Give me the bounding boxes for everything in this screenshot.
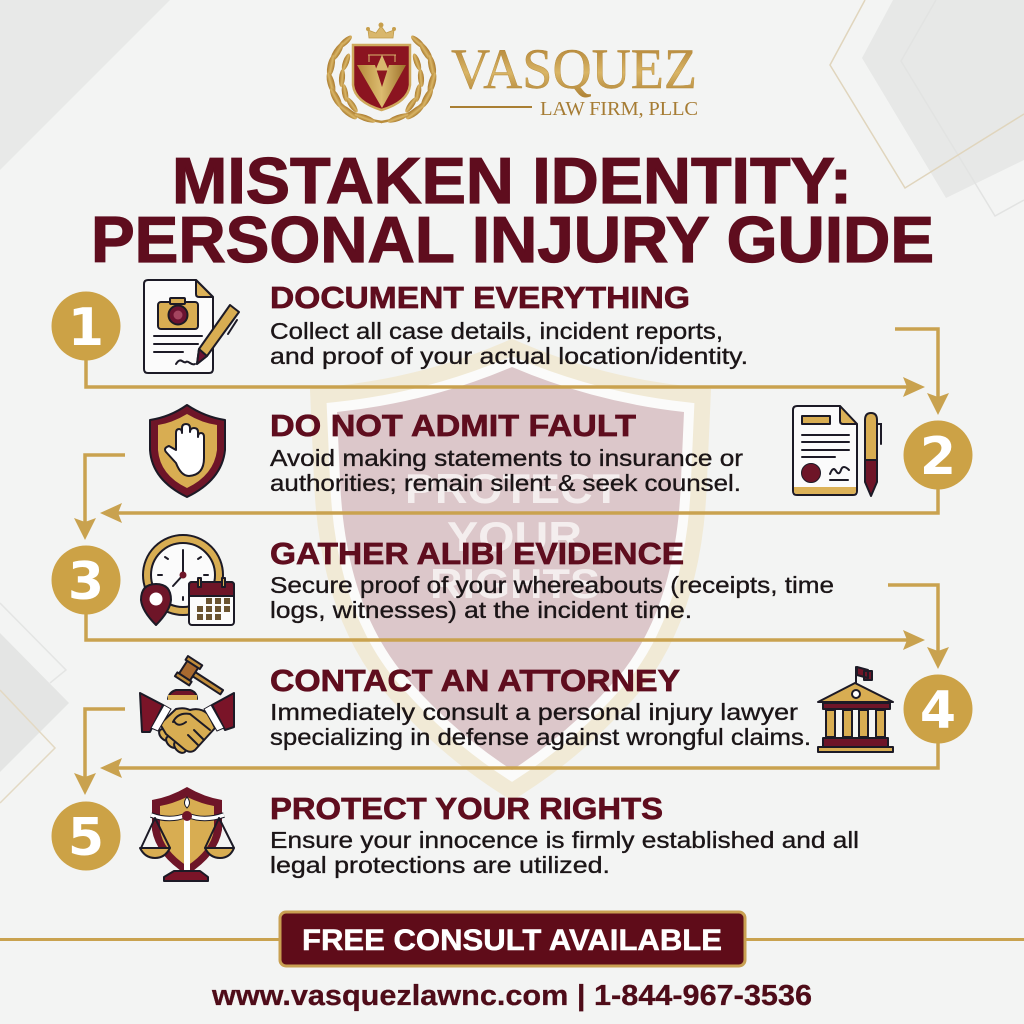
watermark: protect your rights shield [337,367,684,770]
step 5: protect your rights [52,787,859,881]
number badge 5: 5 [68,808,104,868]
number badge 1: 1 [68,298,104,358]
step 3: gather alibi evidence [52,535,834,625]
icon: shield with V [353,45,410,110]
body text [270,572,834,623]
connector arrows [74,329,949,795]
icon: laurel wreath right [381,34,438,125]
call to action button [280,912,745,966]
icon: laurel wreath left [325,34,382,125]
heading: GATHER ALIBI EVIDENCE [270,536,684,571]
step 2: do not admit fault [150,405,972,497]
body text [270,827,859,878]
call to action button: FREE CONSULT AVAILABLE [302,924,722,957]
website and phone: www.vasquezlawnc.com | 1-844-967-3536 [211,980,812,1012]
footer divider line [0,938,1024,941]
body text: Immediately consult a personal injury lawyer [270,699,798,725]
brand name: VASQUEZ [451,38,697,101]
body text: specializing in defense against wrongful claims. [270,724,811,750]
body text: Avoid making statements to insurance or [270,445,743,471]
heading: DOCUMENT EVERYTHING [270,280,690,315]
watermark: protect your rights shield: RIGHTS [430,560,600,607]
body text [270,445,743,496]
body text: legal protections are utilized. [270,852,610,878]
icon: courthouse [818,667,893,752]
title: PERSONAL INJURY GUIDE [91,203,934,276]
icon: crown [366,22,396,38]
sub name: LAW FIRM, PLLC [540,98,698,120]
title [91,144,934,276]
number badge 1 [52,292,120,360]
step 4: contact an attorney [140,656,972,755]
heading: CONTACT AN ATTORNEY [270,663,680,698]
number badge 4 [904,674,972,744]
number badge 4: 4 [920,681,956,741]
logo: Vasquez Law Firm [325,22,698,125]
body text: Secure proof of your whereabouts (receipts, time [270,572,834,598]
body text: logs, witnesses) at the incident time. [270,597,692,623]
title: MISTAKEN IDENTITY: [172,144,852,217]
body text [270,318,748,369]
number badge 3 [52,546,120,614]
icon: gavel and handshake [140,656,234,755]
step 1: document everything [52,280,748,373]
icon: document with camera and pen [144,280,239,373]
number badge 2: 2 [920,427,956,487]
heading: PROTECT YOUR RIGHTS [270,791,663,826]
icon: shield with scales [140,787,234,881]
icon: document with seal and pen [793,406,881,496]
body text: authorities; remain silent & seek counsel. [270,470,741,496]
heading: DO NOT ADMIT FAULT [270,408,636,443]
number badge 5 [52,802,120,870]
watermark: protect your rights shield: YOUR [447,513,582,560]
body text [270,699,811,750]
number badge 2 [904,420,972,490]
body text: Collect all case details, incident reports, [270,318,723,344]
icon: clock, map pin and calendar [141,535,234,625]
number badge 3: 3 [68,552,104,612]
watermark: protect your rights shield: PROTECT [405,465,620,512]
icon: shield with stop hand [150,405,225,497]
body text: and proof of your actual location/identity. [270,343,748,369]
body text: Ensure your innocence is firmly established and all [270,827,859,853]
